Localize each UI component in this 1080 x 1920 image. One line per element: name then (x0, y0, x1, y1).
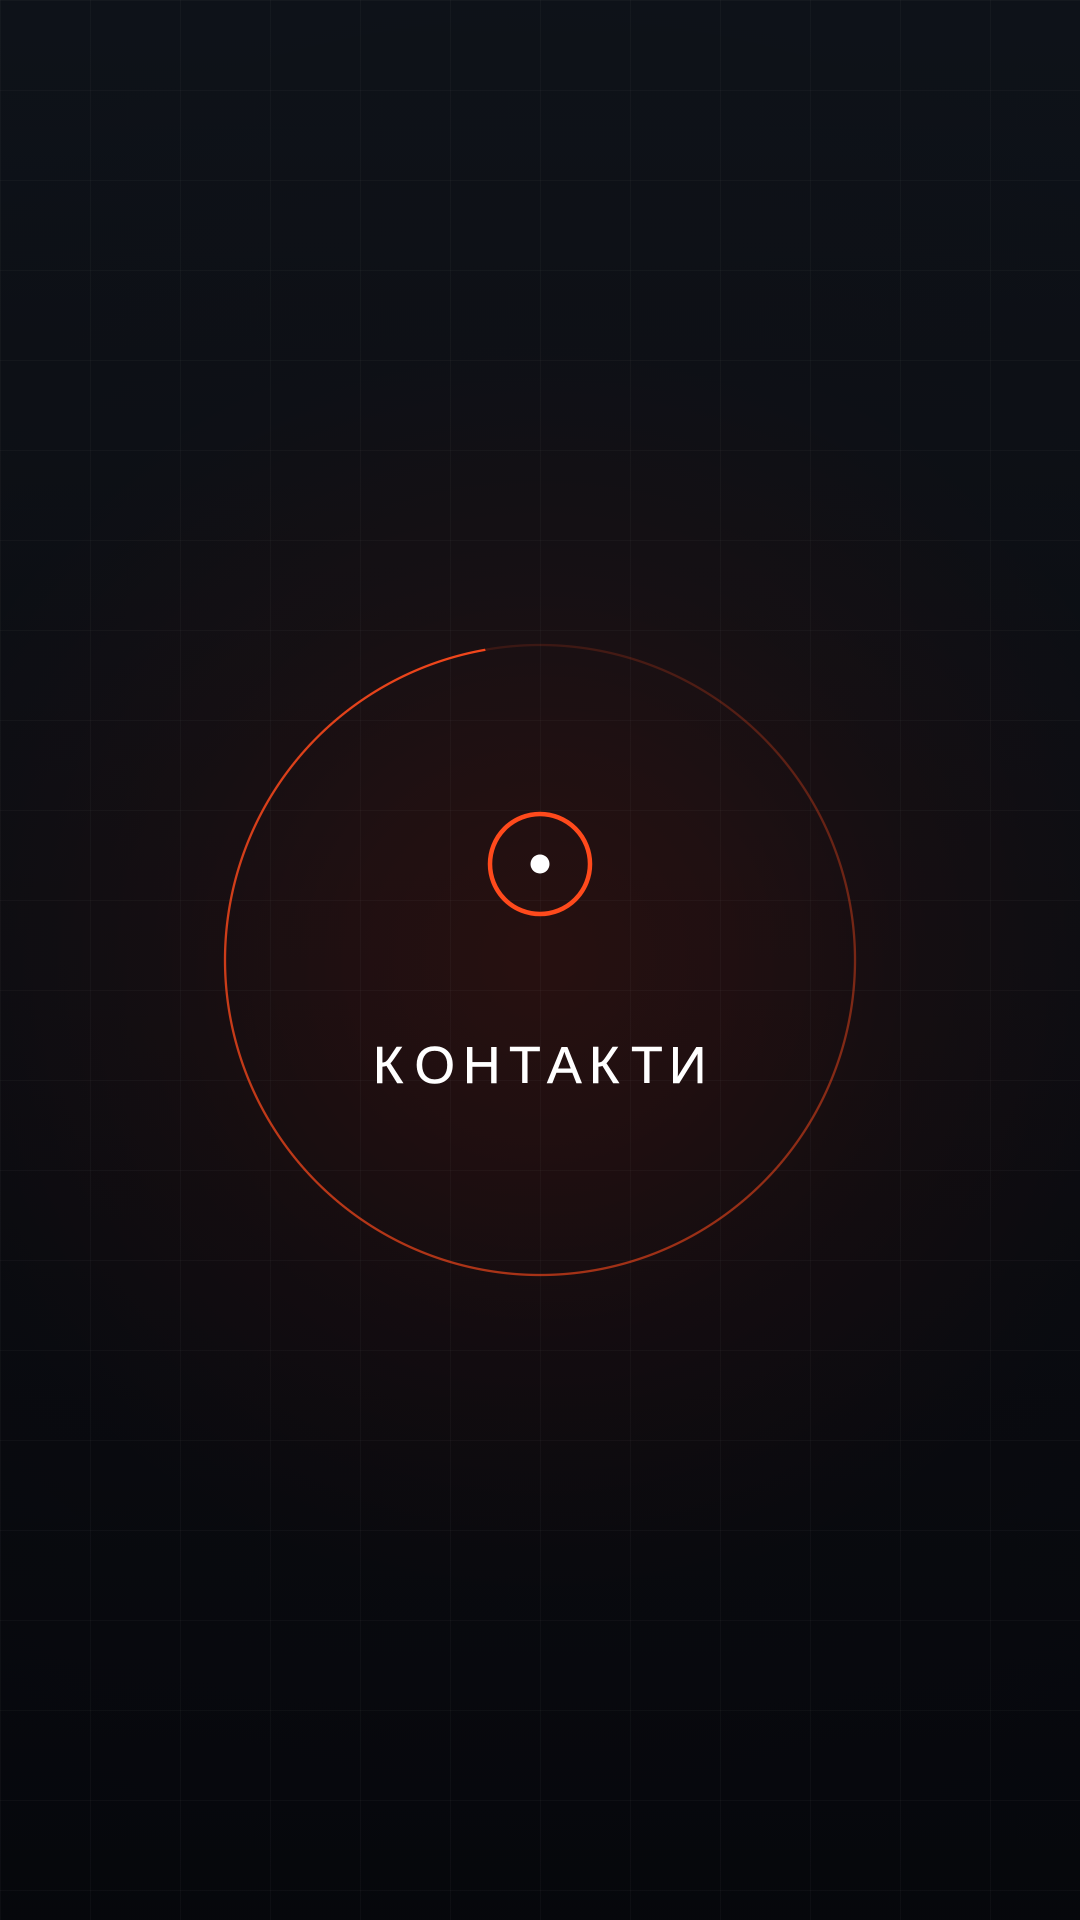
large progress ring (223, 643, 857, 1277)
title: КОНТАКТИ (373, 1037, 706, 1095)
icon: target ring with dot (490, 814, 590, 914)
